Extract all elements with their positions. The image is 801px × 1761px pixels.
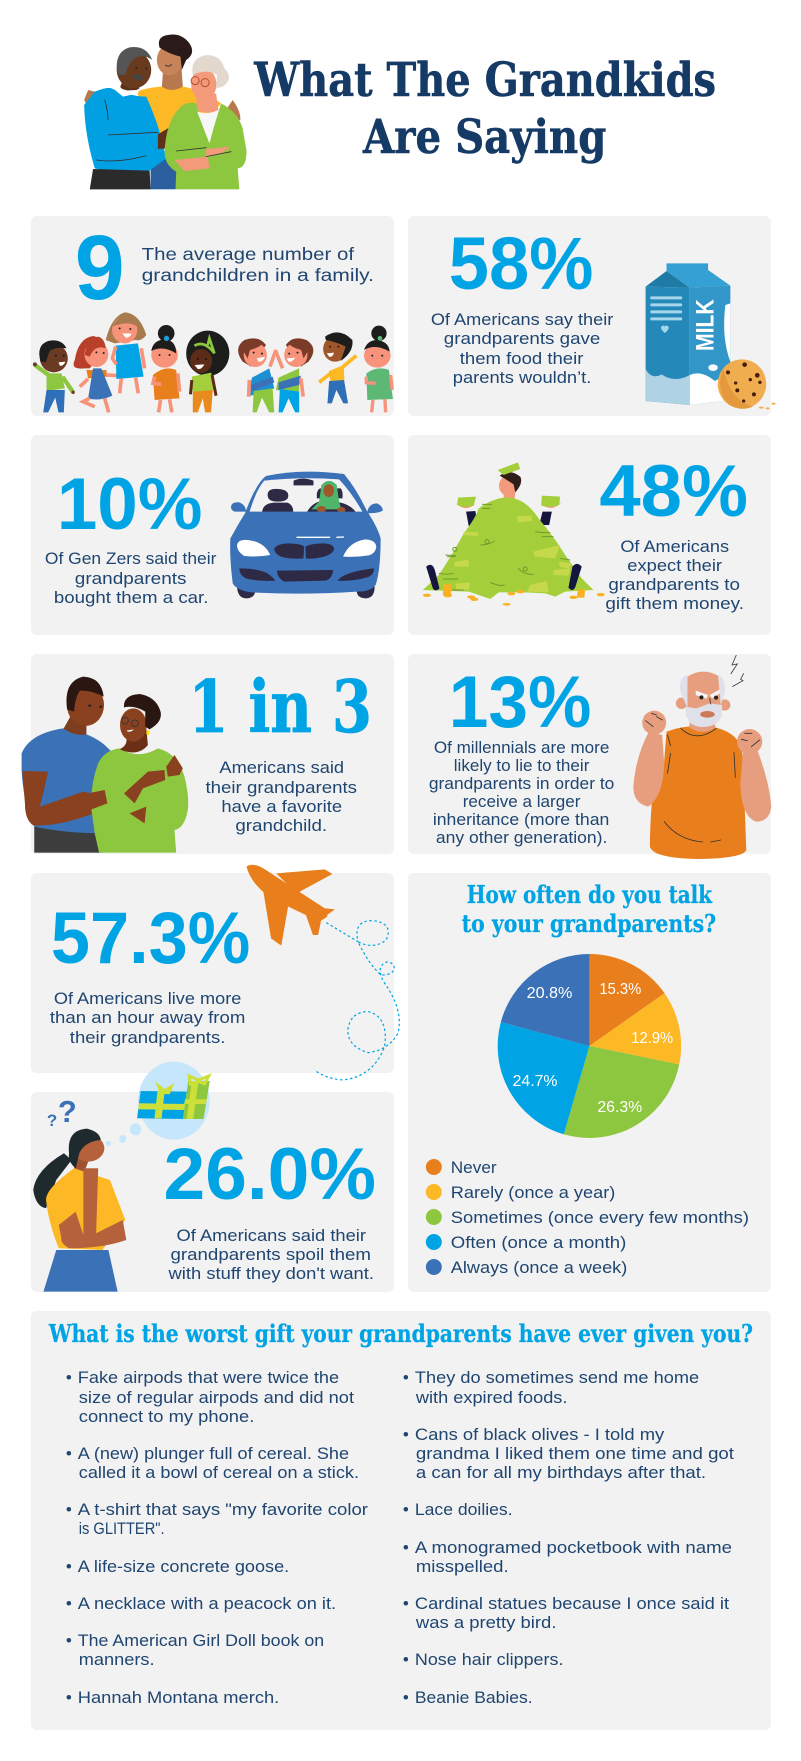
big number: 13%: 13% <box>449 662 591 743</box>
chart legend <box>426 1158 749 1277</box>
text: average number <box>142 244 374 285</box>
illustration: thinking woman with gift bubble <box>33 1062 210 1292</box>
pie chart: 26.3% <box>597 1099 642 1116</box>
list: right column: A monogramed pocketbook with name <box>415 1538 732 1557</box>
panel: money gift <box>408 435 771 635</box>
list: left column: called it a bowl of cereal on a stick. <box>79 1463 359 1482</box>
illustration: airplane with dotted trail <box>247 865 399 1080</box>
list: left column: • <box>66 1557 72 1576</box>
illustration: couple <box>22 677 188 853</box>
illustration: thinking woman with gift bubble: ? <box>58 1094 77 1129</box>
illustration: family of three <box>84 34 247 189</box>
text: millennials inheritance: inheritance (more than <box>433 810 609 829</box>
text: millennials inheritance: receive a larger <box>463 792 581 811</box>
big number: 9: 9 <box>75 217 125 319</box>
illustration: thinking woman with gift bubble: ? <box>47 1111 57 1130</box>
text: spoil them: Of Americans said their <box>177 1226 366 1245</box>
chart legend: Sometimes (once every few months) <box>451 1208 749 1227</box>
big number: 26.0%: 26.0% <box>164 1134 376 1215</box>
chart heading: How often do you talk <box>467 881 712 909</box>
illustration: nine children <box>33 312 393 412</box>
list: left column: A (new) plunger full of cereal. She <box>78 1444 349 1463</box>
list: right column: • <box>403 1538 409 1557</box>
text: millennials inheritance: grandparents in order to <box>429 774 614 793</box>
chart heading <box>462 881 716 938</box>
list: right column: was a pretty bird. <box>415 1613 556 1632</box>
big number: 58%: 58% <box>449 222 593 305</box>
text: food their parents wouldn't: grandparents gave <box>444 329 600 348</box>
text: more than an hour: Of Americans live more <box>54 989 241 1008</box>
pie chart <box>498 954 681 1138</box>
list: right column: Beanie Babies. <box>415 1688 533 1707</box>
panel: car from grandparents <box>31 435 394 635</box>
chart legend: Always (once a week) <box>451 1258 627 1277</box>
text: millennials inheritance: Of millennials are more <box>434 738 609 757</box>
panel: pie chart <box>408 873 771 1292</box>
list: left column: • <box>66 1444 72 1463</box>
list: right column: • <box>403 1650 409 1669</box>
text: expect money: gift them money. <box>605 594 744 613</box>
panel: food from grandparents <box>408 216 776 416</box>
text: more than an hour: than an hour away from <box>50 1008 245 1027</box>
panel: live far from grandparents <box>31 865 399 1080</box>
title: What The Grandkids <box>253 53 716 108</box>
list: left column: A necklace with a peacock on it. <box>78 1594 336 1613</box>
list: right column: • <box>403 1500 409 1519</box>
text: favorite grandchild: have a favorite <box>221 797 342 816</box>
text: millennials inheritance: any other generation). <box>436 828 607 847</box>
text: Gen Zers car: bought them a car. <box>54 588 208 607</box>
panel: spoil with unwanted stuff <box>31 1062 394 1292</box>
list: right column: Cardinal statues because I once said it <box>415 1594 729 1613</box>
panel: worst gifts <box>31 1311 771 1730</box>
list: right column: Lace doilies. <box>415 1500 513 1519</box>
text: expect money <box>605 537 744 613</box>
text: food their parents wouldn't: Of Americans say their <box>431 310 614 329</box>
text: expect money: grandparents to <box>608 575 740 594</box>
pie chart: 24.7% <box>513 1073 558 1090</box>
list: right column: Cans of black olives - I told my <box>415 1425 665 1444</box>
list: right column <box>403 1368 734 1707</box>
list: right column: • <box>403 1368 409 1387</box>
big number: 48%: 48% <box>599 451 748 532</box>
text: spoil them: with stuff they don't want. <box>167 1264 374 1283</box>
list: right column: misspelled. <box>416 1557 509 1576</box>
text: spoil them <box>167 1226 374 1283</box>
chart heading: to your grandparents? <box>462 910 716 938</box>
list: left column: size of regular airpods and did not <box>79 1388 354 1407</box>
big number: 57.3%: 57.3% <box>51 898 250 979</box>
pie chart: 20.8% <box>527 985 573 1002</box>
list: left column: manners. <box>79 1650 155 1669</box>
text: food their parents wouldn't: parents wouldn’t. <box>453 368 591 387</box>
text: spoil them: grandparents spoil them <box>171 1245 371 1264</box>
text: expect money: expect their <box>627 556 722 575</box>
pie chart: 12.9% <box>631 1030 673 1047</box>
text: food their parents wouldn't: them food their <box>460 349 584 368</box>
panel: favorite grandchild <box>22 654 394 854</box>
list: right column: Nose hair clippers. <box>415 1650 563 1669</box>
text: more than an hour: their grandparents. <box>70 1028 225 1047</box>
list: right column: with expired foods. <box>415 1388 567 1407</box>
title: Are Saying <box>362 110 606 165</box>
list: right column: They do sometimes send me home <box>415 1368 699 1387</box>
text: average number: The average number of <box>142 244 355 264</box>
text: average number: grandchildren in a family. <box>142 265 374 285</box>
list: right column: • <box>403 1594 409 1613</box>
list: left column: • <box>66 1688 72 1707</box>
list: left column: connect to my phone. <box>79 1407 254 1426</box>
text: Gen Zers car: grandparents <box>75 569 186 588</box>
list: left column <box>66 1368 368 1707</box>
text: food their parents wouldn't <box>431 310 614 387</box>
illustration: milk carton and cookie: MILK <box>691 299 719 351</box>
list: right column: • <box>403 1688 409 1707</box>
text: more than an hour <box>50 989 245 1047</box>
big number: 10%: 10% <box>57 464 202 545</box>
text: expect money: Of Americans <box>620 537 729 556</box>
text: millennials inheritance <box>429 738 614 847</box>
text: millennials inheritance: likely to lie to their <box>454 756 590 775</box>
text: Gen Zers car: Of Gen Zers said their <box>45 549 217 568</box>
illustration: blue car with driver <box>230 472 383 598</box>
chart legend: Never <box>451 1158 497 1177</box>
panel: lie for inheritance <box>408 654 771 859</box>
chart legend: Often (once a month) <box>451 1233 626 1252</box>
pie chart: 15.3% <box>599 981 641 998</box>
list: left column: A t-shirt that says "my favorite color <box>78 1500 368 1519</box>
text: Gen Zers car <box>45 549 217 607</box>
panel: average grandchildren <box>31 216 394 416</box>
list: left column: • <box>66 1594 72 1613</box>
text: favorite grandchild: grandchild. <box>235 816 327 835</box>
title <box>253 53 716 165</box>
list: right column: a can for all my birthdays after that. <box>416 1463 706 1482</box>
illustration: grumpy grandfather <box>633 655 771 859</box>
list: left column: The American Girl Doll book on <box>78 1631 324 1650</box>
illustration: man on money pile <box>423 462 605 606</box>
illustration: milk carton and cookie <box>646 263 776 409</box>
chart legend: Rarely (once a year) <box>451 1183 615 1202</box>
list: left column: is GLITTER". <box>79 1519 165 1538</box>
big number: 1 in 3: 1 in 3 <box>188 664 372 749</box>
text: favorite grandchild: Americans said <box>219 758 344 777</box>
list: right column: grandma I liked them one time and got <box>416 1444 734 1463</box>
list: left column: • <box>66 1368 72 1387</box>
list: right column: • <box>403 1425 409 1444</box>
text: favorite grandchild: their grandparents <box>205 778 357 797</box>
list: left column: Fake airpods that were twice the <box>78 1368 339 1387</box>
list: left column: • <box>66 1631 72 1650</box>
list: left column: A life-size concrete goose. <box>78 1557 289 1576</box>
list: left column: • <box>66 1500 72 1519</box>
text: favorite grandchild <box>205 758 357 835</box>
list: left column: Hannah Montana merch. <box>78 1688 279 1707</box>
